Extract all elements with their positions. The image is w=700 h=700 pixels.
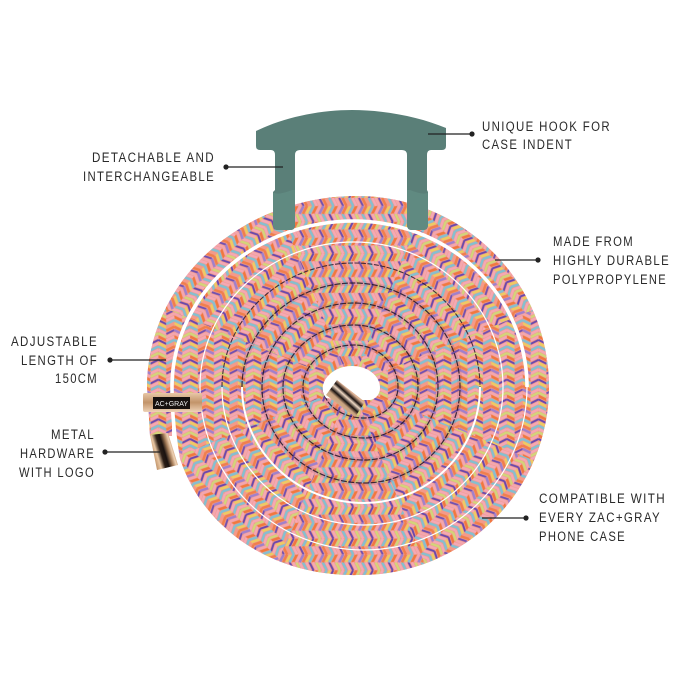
coil separators: dark inner — [242, 283, 460, 483]
coil separator: dark upper — [222, 263, 480, 387]
label: COMPATIBLE WITH — [539, 491, 666, 506]
label: METAL — [51, 427, 95, 442]
metal end at left — [150, 433, 178, 470]
leader dot — [102, 449, 108, 455]
leader dot — [223, 164, 229, 170]
leader line — [428, 133, 472, 135]
leader dot — [469, 131, 475, 137]
label: 150CM — [55, 371, 98, 386]
label: DETACHABLE AND — [92, 150, 215, 165]
label: EVERY ZAC+GRAY — [539, 510, 661, 525]
rope base — [147, 196, 549, 575]
label — [19, 427, 95, 480]
label: HIGHLY DURABLE — [553, 253, 670, 268]
label — [539, 491, 666, 544]
coil shading: inner — [242, 283, 460, 483]
label: LENGTH OF — [21, 353, 98, 368]
coil separator: white lower — [242, 387, 480, 503]
leader dot — [523, 515, 529, 521]
clip frame — [143, 393, 202, 412]
label: CASE INDENT — [482, 137, 573, 152]
label: POLYPROPYLENE — [553, 272, 667, 287]
leader line — [495, 259, 538, 261]
hook — [256, 110, 446, 230]
metal clip with logo — [143, 393, 202, 412]
metal end at centre — [326, 380, 365, 417]
label: UNIQUE HOOK FOR — [482, 119, 611, 134]
leader dot — [535, 257, 541, 263]
label: MADE FROM — [553, 234, 634, 249]
callout: detachable — [83, 150, 283, 184]
leader dot — [107, 357, 113, 363]
hook right-leg shading — [407, 190, 428, 230]
leader line — [482, 517, 526, 519]
label: WITH LOGO — [19, 465, 95, 480]
leader line — [110, 359, 166, 361]
hook body — [256, 110, 446, 230]
hook left-leg shading — [273, 190, 295, 230]
callout: compatible — [482, 491, 666, 544]
label: PHONE CASE — [539, 529, 626, 544]
rope braid texture — [147, 196, 549, 575]
label — [553, 234, 670, 287]
clip logo text: AC+GRAY — [155, 401, 188, 408]
label — [83, 150, 215, 184]
label: ADJUSTABLE — [11, 334, 98, 349]
label — [11, 334, 98, 386]
leader line — [105, 451, 160, 453]
callout: metal hardware — [19, 427, 160, 480]
centre hole — [323, 366, 380, 400]
label: INTERCHANGEABLE — [83, 169, 215, 184]
clip black label — [153, 397, 190, 409]
leader line — [226, 166, 283, 168]
outer coil white gap — [172, 221, 527, 465]
label: HARDWARE — [20, 446, 95, 461]
callout: polypropylene — [495, 234, 670, 287]
callout: hook — [428, 119, 611, 152]
callout: adjustable length — [11, 334, 166, 386]
rope coil — [147, 196, 549, 575]
label — [482, 119, 611, 152]
coil separators: white thin — [200, 242, 527, 550]
